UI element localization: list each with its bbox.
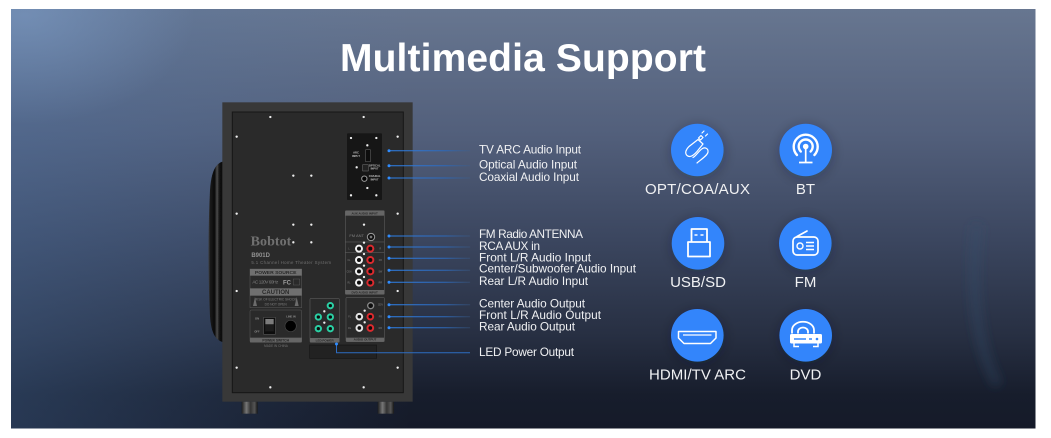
label: USB/SD: [670, 274, 726, 291]
audio output block: [346, 297, 384, 342]
power source and caution label: AC 120V 60Hz: [252, 280, 279, 285]
power switch block: POWER SWITCH: [262, 338, 290, 342]
label: Center output: Center Audio Output: [479, 296, 586, 310]
digital input panel: OPTICAL: [369, 163, 381, 167]
screws: [235, 116, 399, 388]
audio output block: FL: [348, 317, 352, 319]
feature: BT: [779, 124, 832, 198]
power source and caution label: FC: [283, 280, 292, 286]
rating plate: [310, 345, 377, 358]
power source and caution label: CAUTION: [262, 290, 289, 296]
callout dots: [335, 149, 390, 346]
label: HDMI/TV ARC: [649, 366, 746, 384]
side woofer ring: [208, 161, 223, 342]
icon: radio: [779, 217, 832, 270]
power source and caution label: POWER SOURCE: [255, 270, 297, 276]
digital input panel: INPUT: [371, 177, 379, 181]
AUX and DVD audio input block: RL: [348, 283, 351, 285]
icon: USB drive: [672, 217, 724, 270]
audio output block: CEN: [378, 304, 383, 306]
AUX and DVD audio input block: FM ANT: [349, 233, 365, 238]
audio output block: AUDIO OUTPUT: [354, 338, 377, 342]
icon: DVD player: [779, 309, 832, 362]
brand text: [251, 234, 331, 265]
callout line: LED power output: [336, 344, 470, 353]
digital input panel: COAXIAL: [369, 174, 381, 178]
icon: cable: [671, 124, 724, 176]
audio output block: FR: [379, 317, 382, 319]
AUX and DVD audio input block: R: [379, 249, 381, 251]
audio output block: RR: [379, 328, 382, 330]
label: Rear input: Rear L/R Audio Input: [479, 274, 589, 288]
feature: DVD: [779, 309, 832, 384]
brand text: Bobtot: [251, 234, 292, 249]
LED power block: LED POWER: [316, 338, 335, 342]
label: FM: [795, 274, 816, 291]
label: Rear output: Rear Audio Output: [479, 320, 576, 334]
AUX and DVD audio input block: AUX AUDIO INPUT: [351, 211, 378, 215]
audio output block: RL: [348, 328, 352, 330]
power switch block: OFF: [254, 329, 260, 333]
digital input panel: ARC: [353, 151, 359, 155]
brand text: 5.1 Channel Home Theater System: [251, 260, 331, 265]
AUX and DVD audio input block: FR: [379, 260, 382, 262]
AUX and DVD audio input block: SW: [378, 271, 383, 273]
power source and caution label: [250, 269, 302, 308]
label: LED power: LED Power Output: [479, 345, 575, 359]
AUX and DVD audio input block: L: [348, 249, 350, 251]
AUX and DVD audio input block: DVD AUDIO INPUT: [351, 290, 378, 294]
power switch block: LINE IN: [286, 315, 296, 319]
left foot: [242, 402, 258, 414]
label: Front input: Front L/R Audio Input: [479, 250, 592, 264]
title: Multimedia Support: [340, 37, 706, 80]
feature: USB/SD: [670, 217, 726, 291]
speaker rear view: [208, 102, 413, 414]
icon shadows: [671, 125, 833, 364]
AUX and DVD audio input block: RR: [379, 283, 382, 285]
callout lines: [389, 151, 470, 328]
AUX and DVD audio input block: CEN: [347, 271, 352, 273]
digital input panel: INPUT: [352, 154, 360, 158]
label: Optical: Optical Audio Input: [479, 158, 578, 172]
label: DVD: [790, 366, 822, 384]
feature: HDMI/TV ARC: [649, 309, 746, 384]
label: Center/Subwoofer: Center/Subwoofer Audio Input: [479, 262, 637, 276]
label: RCA AUX: RCA AUX in: [479, 239, 540, 253]
icon: antenna signal: [779, 124, 832, 176]
LED power block: [310, 298, 339, 342]
AUX and DVD audio input block: [345, 211, 384, 294]
label: OPT/COA/AUX: [645, 181, 750, 198]
right foot: [378, 402, 394, 414]
AUX and DVD audio input block: FL: [348, 260, 351, 262]
power source and caution label: RISK OF ELECTRIC SHOCK: [255, 298, 297, 302]
feature: FM: [779, 217, 832, 291]
power source and caution label: DO NOT OPEN: [265, 302, 287, 306]
power switch block: ON: [255, 317, 259, 321]
label: TV ARC: TV ARC Audio Input: [479, 142, 582, 156]
icon: HDMI connector: [671, 309, 724, 362]
label: BT: [796, 181, 815, 198]
port labels: [479, 142, 637, 359]
power switch block: [250, 310, 302, 348]
digital input panel: [347, 133, 382, 200]
digital input panel: INPUT: [371, 167, 379, 171]
label: FM Radio: FM Radio ANTENNA: [479, 227, 583, 241]
brand text: B901D: [251, 253, 271, 259]
power switch block: MADE IN CHINA: [264, 344, 289, 348]
label: Coaxial: Coaxial Audio Input: [479, 170, 580, 184]
feature: OPT/COA/AUX: [645, 124, 750, 198]
label: Front output: Front L/R Audio Output: [479, 308, 602, 322]
back plate: [232, 112, 403, 393]
cabinet: [222, 102, 413, 402]
